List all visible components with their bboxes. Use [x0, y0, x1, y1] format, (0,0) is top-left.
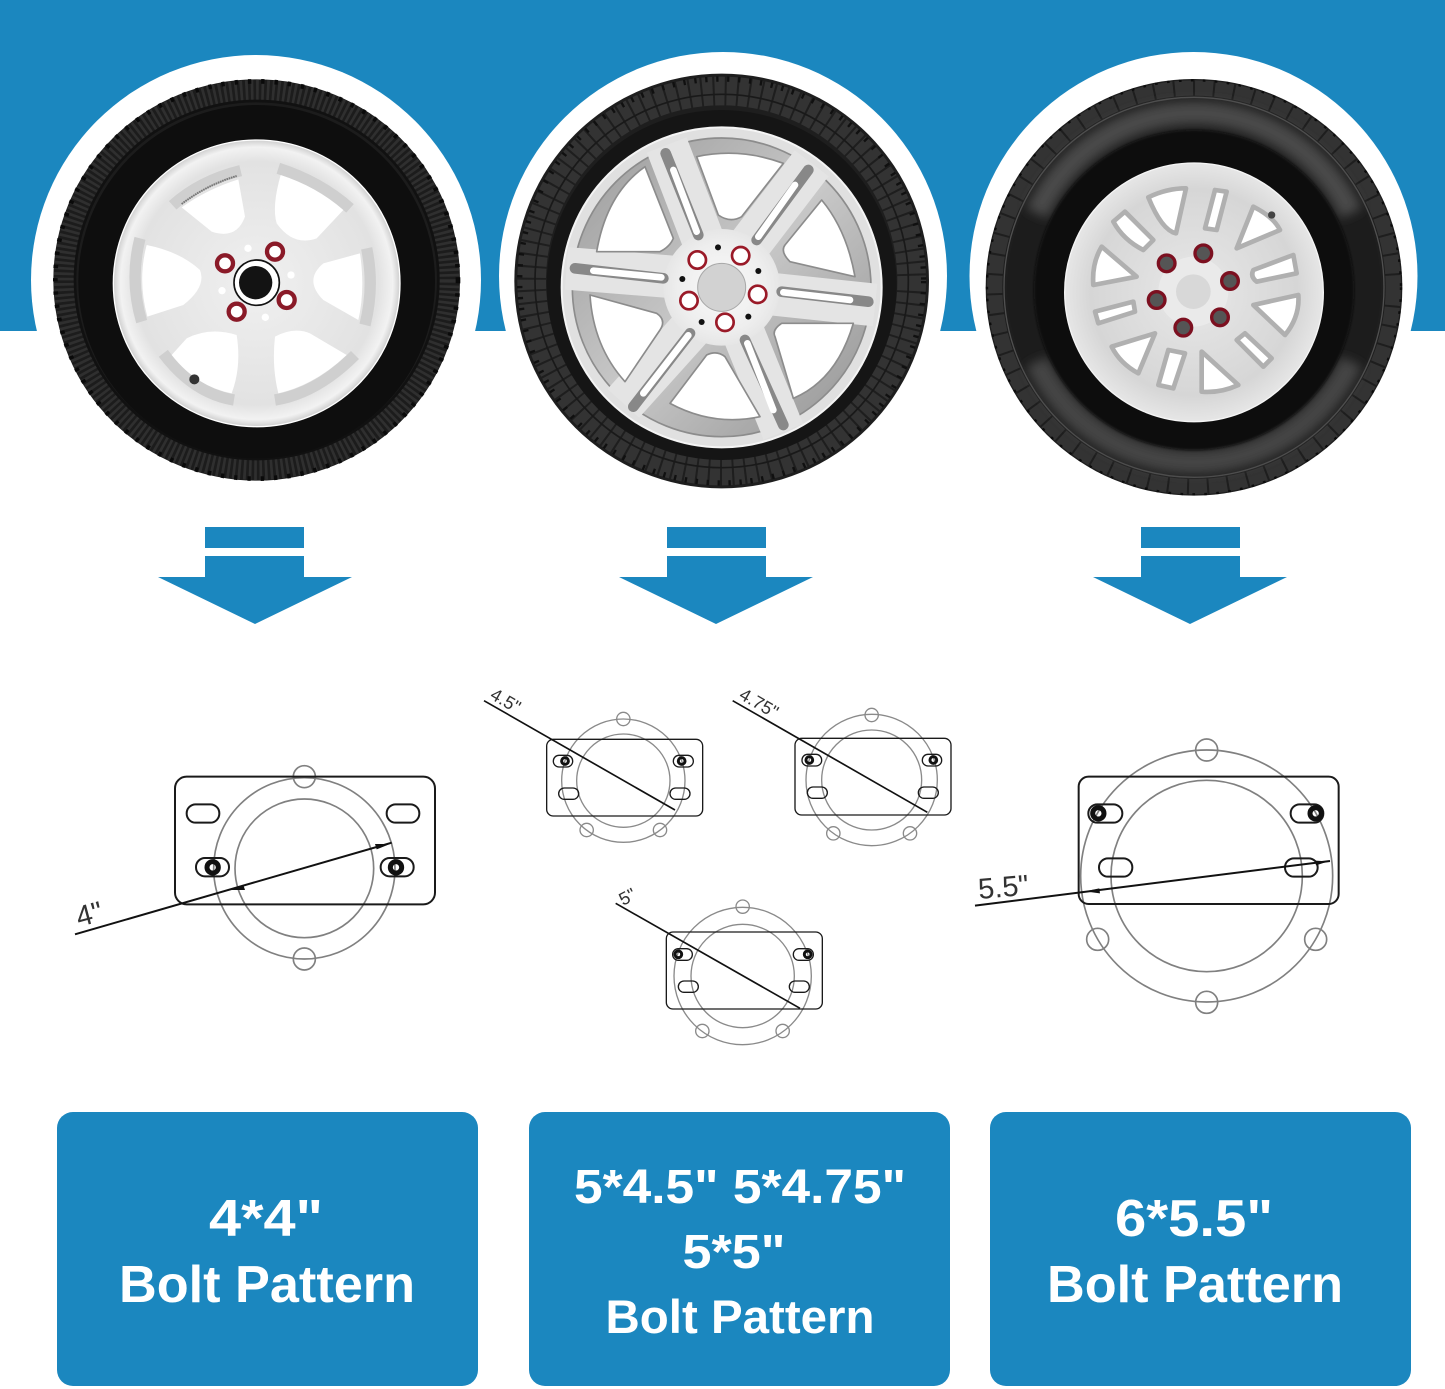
panel: 4*4 bolt pattern — [57, 1112, 478, 1386]
diagram: 4 inch bolt pattern — [75, 766, 435, 970]
panel label: Bolt Pattern — [119, 1256, 415, 1314]
lug nuts — [680, 247, 766, 331]
panel: 5-lug bolt patterns — [529, 1112, 950, 1386]
tire — [53, 79, 460, 481]
hub — [1158, 257, 1228, 327]
dimension line — [75, 843, 392, 934]
dimension line — [733, 701, 927, 812]
flange circles — [1081, 739, 1333, 1013]
panel label: Bolt Pattern — [1047, 1256, 1343, 1314]
label: 4.75 inch: 4.75" — [736, 684, 782, 722]
window pockets — [135, 168, 370, 400]
mounting slots — [553, 755, 693, 799]
diagram: 4.75 inch bolt pattern — [733, 701, 951, 846]
center cap — [698, 263, 746, 311]
license plate outline — [175, 777, 435, 904]
tread blocks — [520, 79, 924, 483]
sidewall — [78, 105, 435, 458]
flange circles — [674, 900, 811, 1045]
wheel 3: light truck wheel with six lugs — [986, 79, 1402, 496]
bolts — [562, 758, 685, 764]
wheel 2: silver double-spoke with five lugs — [514, 74, 929, 488]
spokes — [567, 145, 875, 432]
label: 4 inch: 4" — [73, 896, 106, 934]
valve stem — [189, 374, 199, 384]
inner barrel — [572, 138, 871, 437]
label: 5 inch: 5" — [615, 884, 639, 910]
bolts — [806, 757, 937, 763]
mounting slots — [673, 949, 813, 992]
wheel windows — [142, 175, 362, 393]
mounting slots — [802, 754, 942, 798]
license plate outline — [1079, 777, 1339, 904]
small rim holes — [679, 244, 761, 325]
blue header band — [0, 0, 1445, 331]
windows — [1093, 188, 1298, 392]
tread blocks — [987, 80, 1401, 494]
lug nuts — [1148, 245, 1238, 336]
diagram: 5.5 inch bolt pattern — [975, 739, 1339, 1013]
flange circles — [562, 712, 685, 842]
arrow 3 — [1093, 527, 1287, 624]
inner sidewall — [1034, 130, 1354, 450]
shoulder — [1007, 101, 1381, 474]
arrow 2 — [619, 527, 813, 624]
panel label: Bolt Pattern — [606, 1290, 874, 1343]
tread blocks — [55, 81, 458, 479]
mounting slots — [187, 804, 419, 876]
tire — [986, 79, 1402, 496]
bolts — [207, 862, 402, 873]
hub — [663, 229, 780, 346]
spoke slots — [575, 153, 868, 425]
valve stem — [1268, 211, 1275, 219]
panel heading line 2: 5*5" — [682, 1226, 786, 1279]
rim — [1065, 163, 1323, 422]
dimension line — [616, 903, 800, 1008]
panel heading line 1: 5*4.5" 5*4.75" — [574, 1161, 906, 1214]
label: 5.5 inch: 5.5" — [977, 870, 1030, 906]
bolts — [1093, 808, 1321, 819]
white arch: wheel 2 — [499, 52, 947, 500]
small rim holes — [218, 245, 295, 321]
dimension line — [975, 861, 1330, 906]
diagram: 4.5 inch bolt pattern — [484, 701, 703, 842]
bolts — [675, 951, 811, 958]
white arch: wheel 3 — [970, 52, 1418, 500]
flange circles — [806, 708, 937, 846]
wheel 1: white six-spoke with four lugs — [53, 79, 460, 481]
mounting slots — [1088, 804, 1323, 877]
sidewall — [547, 110, 897, 460]
rim lettering sticker — [182, 176, 237, 204]
upper shoulder band — [1037, 113, 1351, 213]
center cap — [234, 260, 279, 305]
center cap — [1176, 274, 1211, 309]
lower shoulder band — [1037, 362, 1351, 462]
label: 4.5 inch: 4.5" — [487, 684, 524, 717]
license plate outline — [547, 739, 703, 816]
panel heading: 4*4" — [209, 1190, 323, 1248]
diagram: 5 inch bolt pattern — [616, 900, 822, 1045]
arrow 1 — [158, 527, 352, 624]
panel heading: 6*5.5" — [1115, 1190, 1273, 1248]
flange circles — [214, 766, 395, 970]
rim — [113, 140, 400, 427]
license plate outline — [666, 932, 822, 1009]
white arch: wheel 1 — [31, 55, 481, 505]
license plate outline — [795, 738, 951, 815]
tire — [514, 74, 929, 488]
center hole — [239, 266, 272, 299]
windows — [590, 153, 855, 420]
arrowheads — [230, 844, 390, 890]
arrowheads — [1085, 861, 1328, 893]
rim — [562, 127, 882, 447]
lug nuts — [217, 244, 295, 320]
dimension line — [484, 701, 675, 810]
panel: 6*5.5 bolt pattern — [990, 1112, 1411, 1386]
